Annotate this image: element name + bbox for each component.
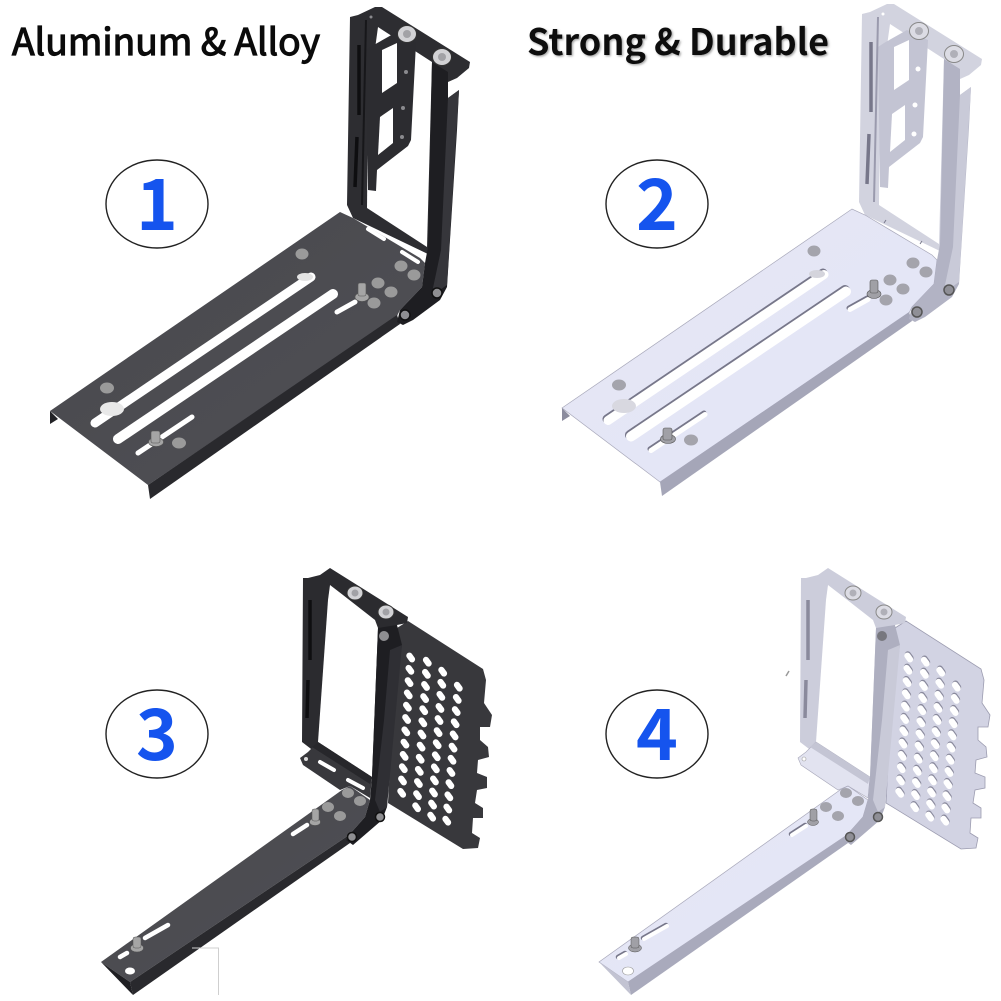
bent arm [346, 625, 402, 845]
upright frame [798, 568, 906, 798]
panel 3: black bracket, narrow arm with perforated card [101, 568, 492, 995]
stray tick mark [786, 671, 789, 676]
standoffs [660, 280, 881, 444]
bent arm [397, 62, 459, 325]
bent arm [844, 625, 900, 845]
badge 3: 3 [136, 679, 178, 781]
rivets [612, 246, 932, 446]
base plate [562, 209, 937, 496]
badge 1 [106, 149, 208, 251]
narrow plate [101, 786, 370, 995]
panel 2: silver bracket, long plate [562, 4, 982, 496]
screws and pins [910, 22, 964, 317]
badge 1: 1 [136, 149, 178, 251]
bent arm [909, 59, 971, 322]
rivets [100, 248, 420, 448]
perforated card [886, 621, 990, 849]
standoffs [628, 809, 818, 952]
base plate [50, 212, 425, 499]
badge 2: 2 [636, 149, 678, 251]
plate slots [95, 229, 418, 453]
rivets [322, 788, 366, 821]
upright frame [859, 4, 982, 252]
badge 3 [106, 679, 208, 781]
badge 4 [606, 679, 708, 781]
screws and pins [845, 586, 892, 842]
standoffs [148, 283, 369, 446]
upright frame [300, 568, 408, 798]
upright frame [347, 7, 470, 255]
badge 4: 4 [636, 679, 678, 781]
heading: Aluminum & Alloy: Aluminum & Alloy [12, 13, 320, 66]
stray corner line [192, 948, 218, 995]
panel 4: silver bracket, narrow arm with perforated card [599, 568, 990, 995]
rivets [820, 788, 864, 821]
perforated card [388, 621, 492, 849]
panel 1: black bracket, long plate [50, 7, 470, 499]
plate slots [607, 220, 922, 450]
screws and pins [347, 586, 394, 842]
heading: Strong & Durable: Strong & Durable [527, 13, 829, 66]
narrow plate [599, 786, 868, 995]
screws and pins [398, 26, 452, 320]
badge 2 [606, 149, 708, 251]
standoffs [130, 809, 320, 952]
